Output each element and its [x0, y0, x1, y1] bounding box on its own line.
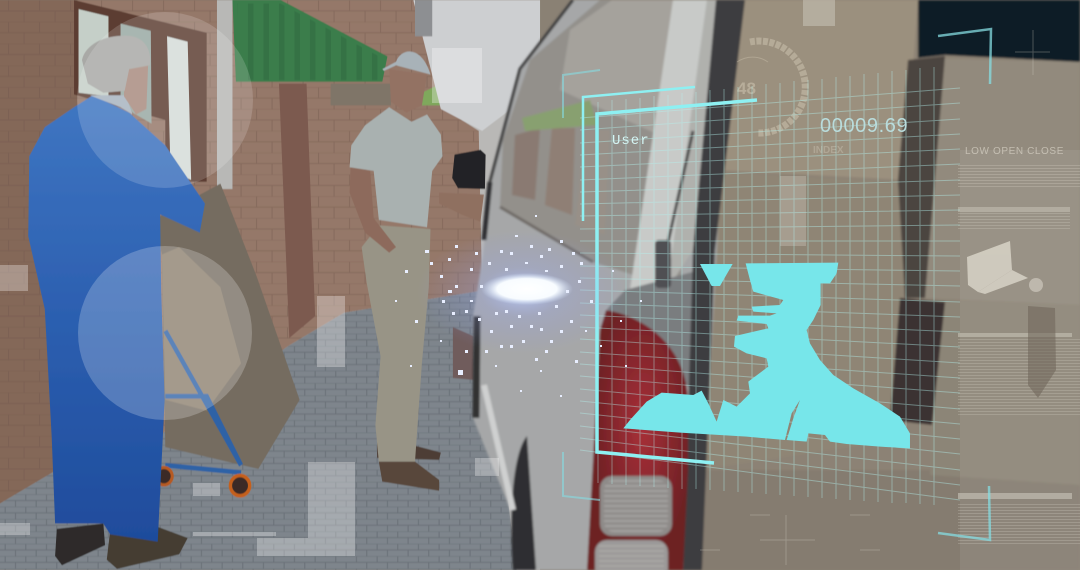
translucent circles: [77, 12, 253, 420]
tail light housing: [587, 310, 688, 570]
metal panel right of strip: [667, 0, 716, 290]
green awning: [232, 0, 387, 82]
brick wall: [0, 0, 482, 503]
outer top left bracket: [563, 70, 600, 118]
lower reflector lens: [595, 540, 668, 570]
delivery driver: [350, 52, 484, 491]
cap: [382, 52, 431, 75]
translucent light blocks: [0, 48, 499, 556]
bare arm, right: [439, 193, 484, 222]
horizontal grid lines: [580, 88, 960, 500]
face: [389, 69, 427, 113]
door seam: [484, 182, 490, 240]
window sill line: [500, 207, 593, 262]
van body: [473, 0, 730, 570]
reflected brick columns: [512, 128, 540, 200]
bottom right bracket: [938, 486, 990, 540]
silhouette head and shoulders: [623, 263, 910, 448]
dashed gauge ring: [737, 41, 805, 133]
grey hair: [82, 36, 150, 93]
faint data panel on the right: [700, 0, 1080, 570]
data rows: [780, 0, 1080, 544]
parcel on far pavement: [453, 327, 474, 380]
faint crosshairs: [700, 30, 1050, 565]
top right bracket: [938, 29, 991, 84]
van side mirror: [452, 150, 486, 189]
upper reflector lens: [600, 476, 672, 536]
van roof edge: [490, 0, 573, 182]
lower door shut line: [476, 316, 477, 418]
neck: [90, 95, 133, 115]
window: [74, 0, 207, 182]
small far awning: [422, 84, 443, 105]
faint heading index: INDEX: [813, 145, 844, 156]
strut bracket: [655, 240, 671, 288]
rear shoe: [377, 442, 441, 460]
vertical grid lines: [598, 67, 934, 505]
delivery van and stacked boxes: [473, 0, 1080, 570]
corner bracket frames: [563, 29, 991, 540]
panel tint: [960, 150, 1080, 570]
white flare core: [481, 273, 573, 305]
light sill strip: [484, 385, 513, 510]
slatted canopy: [331, 84, 391, 105]
reflected awning: [522, 100, 597, 131]
icon: isometric box: [967, 241, 1043, 294]
shirt: [350, 107, 443, 227]
translucent interface overlays: [0, 12, 499, 556]
spark burst on van door: [395, 215, 642, 397]
outer bottom left bracket: [563, 452, 600, 500]
older worker in blue overalls: [28, 36, 205, 569]
grey area over tail light: [607, 270, 700, 400]
drainpipe: [217, 0, 232, 189]
hand trolley: [156, 331, 250, 496]
gauge value: 48: [737, 79, 756, 98]
table column headings: LOW OPEN CLOSE: [965, 146, 1064, 157]
main frame bracket: [597, 100, 757, 463]
front shoe: [379, 462, 439, 491]
perspective grid: [580, 67, 960, 505]
dark gap lower: [890, 298, 945, 425]
gas strut: [667, 131, 693, 247]
boots: [55, 523, 105, 565]
blue glow: [417, 230, 627, 354]
door: [279, 84, 315, 338]
dark door pillar: [683, 0, 745, 570]
rear wheel arch: [511, 436, 536, 570]
bare arm, left: [350, 167, 396, 253]
dark gap top right: [918, 0, 1080, 62]
far building bright side: [413, 0, 540, 131]
pavement: [0, 291, 517, 570]
silhouette collar left: [700, 264, 733, 286]
shadow between boxes: [898, 56, 945, 298]
overalls: [28, 95, 205, 542]
van window glass: [500, 0, 700, 290]
bright door pillar strip: [630, 0, 707, 290]
street scene: wall, pavement and workers: [0, 0, 540, 570]
trousers: [362, 225, 431, 462]
background sky and far building: [0, 0, 540, 570]
user label: User: [612, 133, 650, 149]
numeric readout: 00009.69: [820, 115, 908, 137]
scattered sparkles: [395, 215, 642, 397]
middle bracket: [583, 87, 695, 221]
stacked cardboard boxes: [700, 0, 1080, 570]
cardboard box on trolley: [157, 184, 300, 469]
torn label: [1028, 306, 1056, 398]
cyan dot-matrix user silhouette: [623, 263, 910, 448]
face: [124, 64, 148, 115]
